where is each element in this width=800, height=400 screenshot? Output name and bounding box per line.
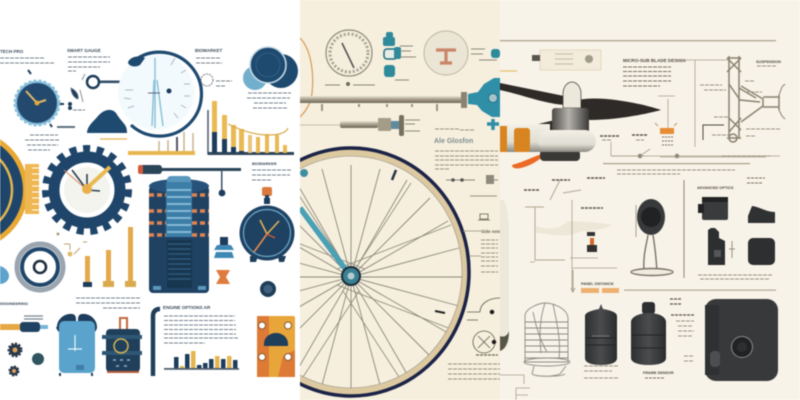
- chart: bolts: [83, 227, 136, 287]
- heading: drone note: MICRO-SUB BLADE DESIGN: [623, 58, 686, 63]
- icon: lens top: [698, 197, 728, 220]
- icon: connector lines: [612, 60, 766, 157]
- icon: teal hub: [468, 78, 500, 130]
- icon: pipeline rule: [611, 142, 780, 158]
- icon: square camera: [748, 238, 775, 265]
- heading: truss labels: SUSPENSION: [756, 60, 781, 64]
- text block: rule notes: [603, 156, 770, 174]
- icon: battery tower: [149, 176, 209, 293]
- text block: lens two caption: [645, 377, 665, 379]
- icon: hourglass: [216, 270, 230, 284]
- icon: rod with pin: [138, 165, 241, 196]
- icon: lens barrel two: [631, 302, 666, 365]
- panel: drone and camera parts: [500, 0, 800, 400]
- panel: flat technical icons: [0, 46, 299, 378]
- text block: arm labels: [600, 135, 648, 140]
- icon: round pressure dial: [424, 31, 485, 75]
- text block: battery note: [252, 170, 292, 180]
- text block: circles intro: [196, 58, 232, 86]
- chart: small bars: [164, 351, 239, 370]
- icon: large arc gauge: [0, 138, 26, 242]
- icon: small schematic: [446, 175, 498, 196]
- icon: orange tags: [581, 288, 619, 293]
- heading: right column: Side notes: [481, 229, 504, 234]
- text block: bike note: [435, 129, 498, 169]
- heading: battery note: BIOMARKER: [252, 161, 277, 166]
- text block: lens note: [747, 178, 765, 183]
- icon: dial gauge: [325, 30, 375, 86]
- icon: small pipe: [703, 125, 724, 140]
- icon: orange valve top: [262, 187, 272, 200]
- icon: small teal valve: [479, 49, 500, 60]
- text block: drone note: [623, 67, 671, 86]
- icon: hill: [87, 110, 127, 133]
- text block: lens caption: [698, 275, 772, 279]
- heading: lens note: ADVANCED OPTICS: [697, 186, 734, 190]
- text block: bottom right: [448, 355, 500, 379]
- text block: top left: [0, 58, 54, 63]
- heading: bike note: Ale Glosfon: [434, 138, 473, 145]
- heading: gauges: SMART GAUGE: [67, 48, 101, 53]
- icon: bottle lens: [708, 228, 735, 265]
- icon: target ring: [0, 244, 63, 290]
- icon: lower connector: [500, 375, 530, 400]
- icon: wedge camera: [748, 206, 775, 223]
- text block: lens one caption: [584, 366, 618, 378]
- icon: orange label chart: [655, 96, 677, 145]
- text block: under circles: [247, 93, 291, 108]
- icon: dark base of bottle: [500, 331, 509, 351]
- icon: teal stack: [214, 237, 234, 258]
- text block: lower left caption: ENGINEERING: [0, 301, 28, 306]
- icon: dark motor: [102, 318, 142, 372]
- icon: section rule: [624, 290, 776, 291]
- icon: small parts: [56, 232, 87, 256]
- icon: small gears: [9, 344, 44, 376]
- heading: top left: TECH PRO: [0, 49, 24, 54]
- text block: box labels: [670, 299, 694, 361]
- icon: teal fork: [300, 169, 360, 285]
- icon: drone arm: [500, 124, 596, 168]
- text block: below gauge: [25, 135, 60, 150]
- icon: truss arm: [727, 56, 785, 142]
- panel: bicycle diagram: [233, 0, 504, 400]
- icon: wall clock: [240, 198, 294, 262]
- icon: long tube: [300, 92, 467, 111]
- icon: pale bottle: [500, 200, 509, 351]
- icon: blue machine: [56, 314, 97, 376]
- icon: big gear clock: [46, 149, 128, 231]
- icon: webcam on stand: [631, 199, 673, 276]
- icon: bicycle wheel: [233, 148, 469, 396]
- text block: engine options: [164, 316, 238, 343]
- text block: mount labels: [524, 178, 605, 208]
- heading: orange tags: PANEL DISTANCE: [581, 282, 614, 286]
- arrow: yellow marker: [100, 138, 127, 140]
- icon: yellow ruler: [25, 164, 39, 214]
- icon: lens barrel one: [585, 304, 617, 365]
- icon: top rule: [500, 40, 776, 41]
- icon: gear schematics: [467, 214, 500, 353]
- icon: teal fittings: [383, 32, 416, 80]
- chart: yellow and navy bars: [208, 101, 294, 155]
- icon: short piston: [300, 115, 420, 136]
- icon: small blue gauge: [15, 70, 75, 128]
- icon: rim arc upper left: [300, 38, 313, 117]
- heading: engine options: ENGINE OPTIONS AR: [163, 305, 211, 310]
- heading: lens two caption: FRAME SENSOR: [643, 371, 674, 375]
- icon: pipe connector: [0, 316, 48, 332]
- icon: wire cage: [524, 303, 570, 376]
- chart: thin bars on yellow base: [128, 132, 195, 155]
- icon: orange plate: [257, 316, 295, 377]
- text block: right column: [463, 231, 498, 272]
- icon: mount bracket: [525, 180, 617, 292]
- text block: truss labels: [700, 66, 780, 136]
- icon: divider: [683, 180, 685, 278]
- icon: sensor module: [500, 50, 601, 71]
- icon: ring and rod: [67, 74, 120, 112]
- icon: drone propeller: [500, 82, 661, 134]
- icon: large dial: [118, 52, 201, 136]
- icon: bracket: [153, 309, 160, 376]
- arrow: down to labels: [571, 270, 575, 292]
- icon: black camera box: [705, 299, 778, 381]
- text block: center note: [76, 298, 140, 308]
- icon: overlapping circles: [243, 47, 298, 90]
- icon: round knob: [260, 281, 276, 297]
- icon: motor housing: [552, 108, 589, 136]
- text block: gauges: [68, 57, 110, 71]
- heading: circles: BIOMARKET: [195, 48, 222, 53]
